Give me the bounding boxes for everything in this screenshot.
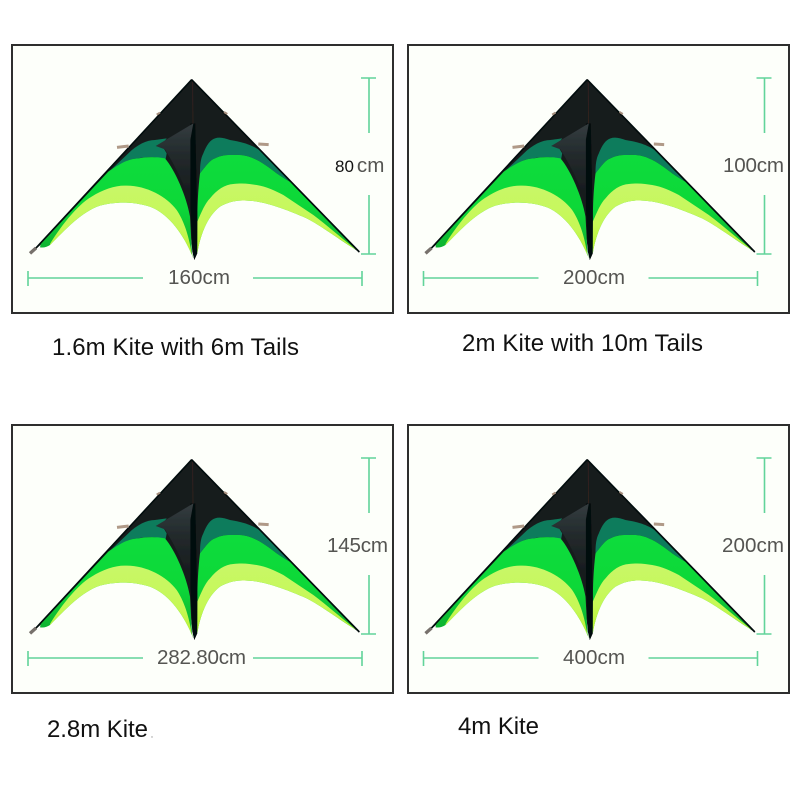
- caption: 1.6m kite: 1.6m Kite with 6m Tails: [52, 334, 299, 361]
- height dimension line: [756, 458, 772, 634]
- height dimension line: [361, 458, 376, 634]
- height label: 200cm: [722, 534, 784, 557]
- width dimension line: [28, 651, 362, 666]
- kite illustration: [425, 459, 755, 640]
- caption: 4m kite: 4m Kite: [458, 713, 539, 740]
- width label: 200cm: [563, 266, 625, 289]
- width label: 282.80cm: [157, 646, 246, 669]
- panel: 2m kite: [408, 45, 789, 313]
- width dimension line: [424, 651, 758, 666]
- kite illustration: [30, 79, 360, 260]
- caption: 2m kite: 2m Kite with 10m Tails: [462, 330, 703, 357]
- kite illustration: [425, 79, 755, 260]
- height dimension line: [756, 78, 772, 254]
- width dimension line: [28, 271, 362, 286]
- panel: 1.6m kite: [12, 45, 393, 313]
- panel: 2.8m kite: [12, 425, 393, 693]
- panel: 4m kite: [408, 425, 789, 693]
- height label: 100cm: [723, 154, 784, 177]
- height label: 80cm: [335, 154, 384, 177]
- width label: 400cm: [563, 646, 625, 669]
- width dimension line: [424, 271, 758, 286]
- height label: 145cm: [327, 534, 388, 557]
- caption: 2.8m kite: 2.8m Kite: [47, 716, 148, 743]
- width label: 160cm: [168, 266, 230, 289]
- height dimension line: [361, 78, 376, 254]
- kite illustration: [30, 459, 360, 640]
